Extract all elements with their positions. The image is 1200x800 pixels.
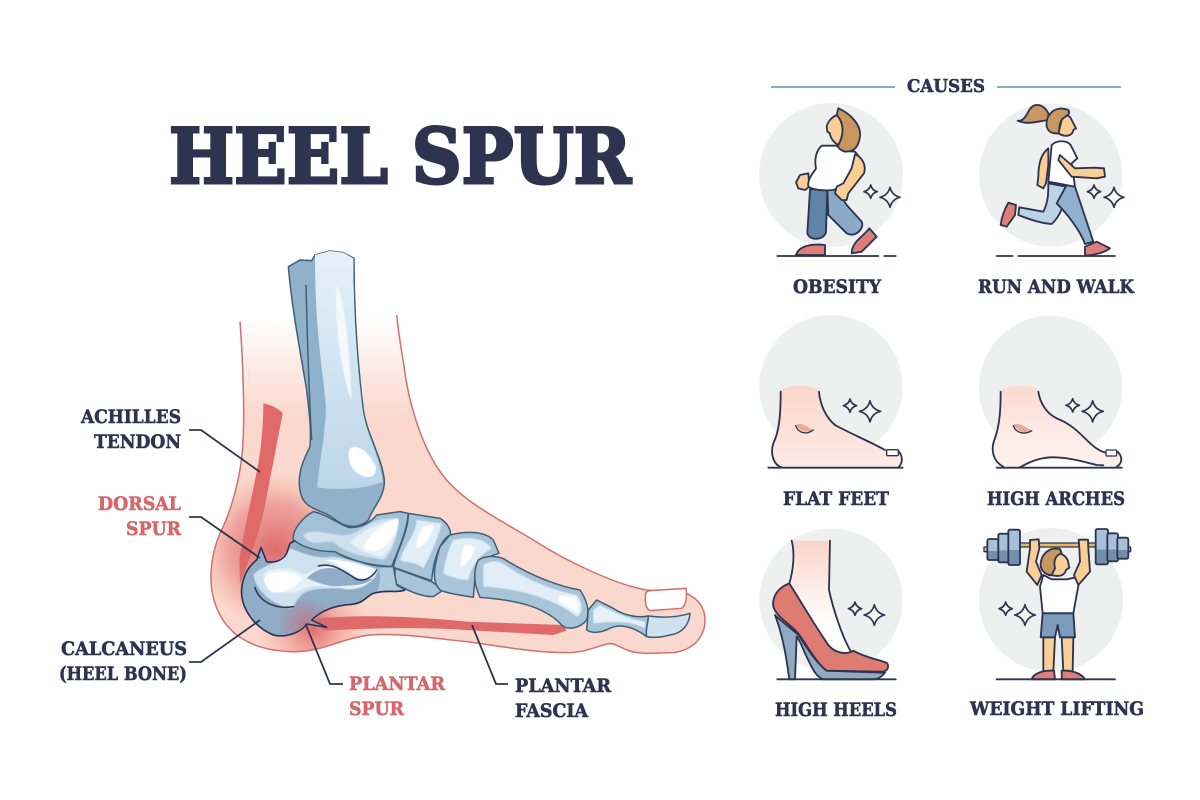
foot skin	[211, 315, 705, 653]
icon: run and walk	[979, 103, 1124, 256]
label: plantar spur: SPUR	[349, 699, 405, 720]
label: achilles tendon	[80, 407, 181, 453]
plantar fascia	[315, 616, 567, 635]
label: weight lifting: WEIGHT LIFTING	[969, 699, 1144, 720]
label: dorsal spur: DORSAL	[98, 494, 181, 515]
navicular	[393, 513, 450, 581]
label: achilles tendon: ACHILLES	[80, 407, 181, 428]
label: calcaneus: CALCANEUS	[61, 639, 187, 660]
icon: flat feet	[759, 315, 903, 468]
talus	[293, 512, 408, 567]
label: plantar fascia	[515, 676, 612, 722]
achilles tendon	[239, 403, 283, 583]
label: calcaneus	[59, 639, 187, 685]
foot anatomy illustration	[200, 251, 705, 663]
causes heading: CAUSES	[907, 77, 985, 97]
label: high arches: HIGH ARCHES	[987, 489, 1125, 510]
label: obesity: OBESITY	[793, 277, 882, 298]
toenail	[645, 588, 686, 611]
label: run and walk: RUN AND WALK	[978, 277, 1135, 298]
icon: weight lifting	[979, 528, 1131, 679]
lower tarsal	[395, 568, 443, 597]
icon: high arches	[979, 316, 1122, 468]
inflammation glow	[212, 480, 362, 651]
label: plantar fascia: FASCIA	[515, 701, 589, 722]
label: plantar spur	[349, 674, 446, 720]
icon: obesity	[759, 103, 903, 256]
label: high heels: HIGH HEELS	[775, 700, 897, 721]
label: calcaneus: (HEEL BONE)	[59, 664, 187, 685]
label: achilles tendon: TENDON	[94, 432, 181, 453]
label: dorsal spur: SPUR	[126, 519, 182, 540]
leader lines	[189, 430, 508, 684]
label: flat feet: FLAT FEET	[783, 489, 889, 510]
calcaneus	[242, 541, 405, 636]
label: plantar spur: PLANTAR	[349, 674, 446, 695]
label: plantar fascia: PLANTAR	[515, 676, 612, 697]
toe bones	[587, 600, 690, 637]
icon: high heels	[759, 528, 903, 679]
metatarsal	[475, 556, 588, 628]
title: HEEL SPUR	[169, 112, 632, 201]
foot outline	[211, 315, 705, 653]
label: dorsal spur	[98, 494, 182, 540]
cuneiform	[434, 532, 499, 597]
tibia	[288, 251, 384, 526]
